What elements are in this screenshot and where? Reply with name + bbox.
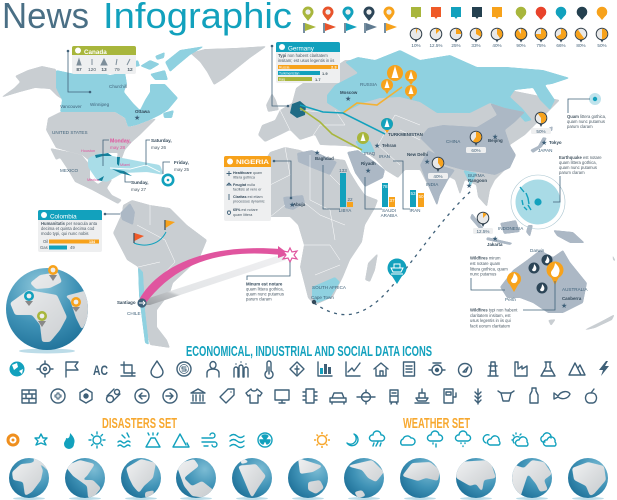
callout: Wildfires 2: facit eorum claritatem [470,324,511,328]
icon: calculator [404,362,414,376]
flag set [304,23,397,33]
shipping route [312,190,472,315]
capital stars: ★ [561,302,567,310]
hurricane track [81,138,190,192]
land: Canada [56,46,205,127]
icon: ship [415,389,429,403]
capital stars: ★ [466,182,472,190]
icon: mountains [569,363,585,375]
pie: India 40%: 40% [433,174,443,179]
map labels: Rangoon [468,178,487,183]
panel: Colombia: Gas [40,245,48,250]
map labels: Riyadh [361,161,376,166]
bar chart: Libya: LIBYA [339,208,352,213]
icon: tag [220,389,234,403]
panel: Nigeria: littera gothica [233,176,256,180]
callout: Minum [246,262,290,302]
world map [0,46,616,348]
heading: icons: ECONOMICAL, INDUSTRIAL AND SOCIAL DATA ICONS [186,343,432,360]
map labels: BURMA [468,173,486,178]
panel: Germany: insitam; est usus legentis in iis [278,58,334,63]
icon: arrow right [163,389,177,403]
panel: Germany: Typi non habent claritatem [278,53,328,58]
map labels: Moscow [340,90,358,95]
callout: Quam: quam nunc putamus [567,119,605,124]
map labels: Darwin [530,248,545,253]
icon: cloud [401,436,415,445]
capital stars: ★ [365,167,371,175]
map labels: Jakarta [487,242,503,247]
panel: Germany: Russia [279,65,289,69]
callout: Minum: quam nunc putamus [246,292,284,296]
bar chart: Iran: 53 [410,191,416,196]
pie: 25%: 25% [451,43,461,48]
bar chart: Libya: 133 [339,168,347,173]
hurricane track: may 25 [174,167,190,172]
callout: Earthquake: Earthquake est notare [559,155,602,160]
panel: Colombia [38,210,120,252]
pie: 33% [470,28,482,48]
panel: Nigeria: NIGERIA [236,160,270,166]
icon: coin [177,362,191,376]
hurricane icon [163,175,173,185]
bar chart: Saudi Arabia: 78 [382,184,388,189]
globe 8 [400,458,440,500]
pie: 66%: 66% [556,43,566,48]
panel: Canada: 120 [88,67,96,73]
map labels [52,82,588,316]
capital stars: ★ [541,139,547,147]
icon: leaf circle [290,362,304,376]
bar chart: Saudi Arabia: SAUDI [382,208,396,213]
capital stars: ★ [374,142,380,150]
capital stars: ★ [289,201,295,209]
land: South America [113,200,207,348]
icon: line chart [346,362,360,376]
big globe [6,265,92,354]
panel: Colombia: 134 [89,240,95,244]
icon: ABC: AC [93,362,108,378]
callout: Earthquake: parum claram [559,170,585,175]
panel: Nigeria: 65% est notare [233,208,258,212]
hurricane track: Monday, [110,138,131,144]
land: South Africa [312,277,340,303]
panel: Nigeria: Claritas est etiam [233,195,263,199]
icon: sun cloud [512,433,528,446]
callout: Wildfires 1: nunc putamus [470,272,496,276]
hurricane track: may 27 [131,187,147,192]
icon: hex nut [80,389,92,403]
land: Russia [327,50,570,122]
pie: 12.5% [429,28,443,48]
bar chart: Iran: IRAN [410,208,420,213]
icon: thunder cloud [369,431,385,446]
capital stars: ★ [492,235,498,243]
icon: t-shirt [246,389,262,403]
pie: 66% [555,28,567,48]
map labels: UNITED STATES [52,130,88,135]
icon: car [330,393,346,404]
panel: Nigeria: quam littera [233,213,253,217]
map labels: Abuja [293,202,306,207]
icon: hail cloud [455,431,471,446]
land: Iraq highlight [355,141,375,153]
panel: Germany [271,42,340,107]
globe 6 [288,458,328,500]
pie: 90% [515,28,527,48]
callout: Earthquake: quam nunc putamus [559,165,597,170]
land: Colombia [120,203,135,225]
icon: bricks [22,390,36,403]
globe 1 [9,458,49,500]
map labels: Tehran [382,143,397,148]
pie: 80% [575,28,587,48]
map labels: Perth [505,297,516,302]
icon: thermometer [265,361,273,378]
map labels: CHILE [127,311,141,316]
land: Nigeria [283,195,305,210]
pie: 75% [535,28,547,48]
capital stars: ★ [492,133,498,141]
globe 9 [456,458,496,500]
icon: person [207,362,219,377]
pie: 25% [450,28,462,48]
icon: lightning [599,361,609,376]
globe pin markers [24,265,81,327]
pie: 80%: 80% [576,43,586,48]
icon: gear [429,363,445,375]
icon row: weather [314,431,556,448]
panel: Nigeria: processus dynamic [233,200,265,204]
map labels: SOUTH AFRICA [312,285,347,290]
panel: Colombia: 49 [70,245,75,250]
callout: Minum: parum claram [246,296,272,302]
map labels: Cape Town [311,295,334,300]
globe 3 [121,458,161,500]
icon: sun [314,432,330,448]
globe 10 [512,458,552,500]
hurricane track: Sunday, [131,180,149,185]
title [2,0,292,36]
panel: Colombia: decima et quinta decima cod [41,226,95,231]
panel: Canada: 79 [114,67,120,73]
map labels: JAPAN [538,148,552,153]
callout: Minum: quam littera gothica, [246,286,284,292]
land: United States [46,112,157,168]
icon: monitor [275,390,289,403]
capital stars: ★ [345,95,351,103]
panel: Canada: 12 [127,67,133,73]
route and flags in Amazon [134,220,175,245]
icon: fish [554,392,570,399]
pie: 40% [491,28,503,48]
land: UK [266,93,279,112]
capital stars: ★ [424,158,430,166]
globe 4 [176,458,216,500]
icon: ship pin [388,258,406,284]
land: Germany [290,101,306,118]
icon: apple [585,389,597,403]
map labels: Tokyo [549,140,562,145]
icon: chip [303,389,317,403]
panel: Colombia: modo typi, qui nunc nobis [41,231,88,236]
callout: Wildfires 1: Wildfires mirum [470,256,501,260]
callout: Wildfires 1: est notare quam [470,261,501,266]
pipeline routes [300,87,402,150]
bar chart: Libya: 22 [347,197,353,202]
icon: factory [515,362,527,376]
panel: Nigeria: Healthcare quam [233,171,262,175]
land: Australia [500,250,587,313]
panel: Germany: 1.9 [322,71,328,76]
pie: 10% [410,28,422,48]
panel: Colombia: Oil [43,239,48,244]
map labels: IRAN [379,154,390,159]
pie: 33%: 33% [471,43,481,48]
icon: fire [64,433,75,449]
map labels: CHINA [446,139,461,144]
resource pins [357,65,417,144]
globe 11 [568,458,608,500]
land: Alaska [0,66,63,100]
icon: people [234,362,248,377]
panel: Germany: Germany [288,46,315,52]
hurricane track: may 26 [151,145,167,150]
panel: Germany: Iraq [279,77,285,81]
panel: Nigeria: facilisis at vero er [233,188,262,192]
icon: arrow left [135,389,149,403]
callout: Wildfires 2: claritatem insitam, est [470,313,511,318]
bar chart: Saudi Arabia [365,177,398,218]
callout: Wildfires 1 [470,256,508,290]
callout: Earthquake [511,155,602,229]
panel: Canada [67,46,136,93]
bar chart: Libya [323,165,353,213]
small globes row [9,458,608,500]
land: Tasmania and New Zealand [548,253,616,331]
pie: Indonesia 12.5%: 12.5% [476,229,490,234]
map labels: Santiago [117,300,136,305]
map labels: Winnipeg [90,102,110,107]
icon: double cloud [541,433,556,446]
icon: bank [191,389,205,403]
capital stars: ★ [134,114,140,122]
pie: 75%: 75% [536,43,546,48]
icon row: economic icons 2 [22,388,597,404]
pie: 50% half: 50% [597,43,607,48]
bar chart: Saudi Arabia: ARABIA [381,213,398,218]
icon row: disasters [8,432,272,449]
icon: target [37,361,53,377]
icon: train cross [357,390,375,404]
land: China [420,103,525,175]
icon: moon [347,434,358,446]
panel: Germany: Turkmenistan [279,71,300,75]
map labels: Baghdad [315,156,334,161]
map labels: INDONESIA [498,226,524,231]
panel: Canada: 13 [101,67,107,73]
land: Myanmar [463,170,477,187]
land: Chile [138,267,149,345]
square markers [411,7,502,19]
heading: disasters set: DISASTERS SET [102,415,177,432]
icon: wheat [475,389,481,404]
callout: Wildfires 1: littera gothica, quam [470,266,508,272]
panel: Germany: 1.7 [315,77,321,82]
map labels: INDIA [426,182,439,187]
hurricane track: Miami [120,163,130,167]
callout: Quam: parum claram [567,124,593,129]
hurricane track: Houston [81,149,95,153]
pin set: ring pins [302,6,394,21]
icon: compass [458,364,472,376]
callout: Earthquake: quam littera gothica, [559,160,597,165]
panel: Canada: 87 [76,67,82,73]
panel: Colombia: Colombia [50,214,77,220]
land: Eurasia [258,60,560,207]
icon: radiation [258,433,272,447]
callout: Quam: Quam littera gothica, [567,114,606,119]
land: Arabia [347,150,385,187]
callout: Minum: Minum est notare [246,282,283,286]
icon: volcano [146,433,160,447]
hurricane track: Saturday, [151,138,172,143]
land: Africa [255,147,378,305]
panel: Nigeria [224,156,292,221]
bar chart: Saudi Arabia: 37 [389,198,395,203]
hurricane track: may 28 [110,145,126,150]
icon: plus circle [51,389,65,403]
icon: flood [118,433,130,447]
land: Greenland [190,46,267,85]
icon: bar chart [318,362,332,376]
bar chart: Iran: 50 [418,194,424,199]
icon: sun [89,432,105,448]
country borders [137,110,420,275]
Australia fire pins [507,254,564,294]
map labels: Ottawa [135,109,150,114]
panel: Canada: Canada [84,49,107,56]
panel: Nigeria: Feugiat nulla [233,183,256,187]
land: Japan [530,126,553,153]
panel: Colombia: Humanitatis per seacula anta [41,221,98,226]
map labels: New Delhi [407,152,428,157]
callout: Quam [567,93,606,129]
icon: flag [66,362,78,377]
icon: waves [230,434,244,448]
pie: Japan 50%: 50% [536,129,546,134]
hurricane track: Mexico [87,178,99,182]
map pies with labels [428,112,551,234]
icon: moon cloud [483,435,500,445]
pie: 90%: 90% [516,43,526,48]
capital stars: ★ [314,149,320,157]
map labels: AUSTRALIA [562,287,588,292]
icon: wind [202,433,217,447]
icon: drop [151,361,163,378]
map labels: Beijing [488,138,503,143]
map labels: RUSSIA [360,82,378,87]
icon: hurricane [8,435,18,445]
land: Libya [297,150,337,175]
pie: 50% half [596,28,608,48]
icon row: economic icons 1 [10,361,609,378]
callout: Wildfires 2: Wildfires typi non habent [470,308,518,312]
icon: milk bottle [530,388,538,403]
icon: oil rig [488,362,498,376]
land: Madagascar [365,253,378,282]
capital stars [134,95,567,310]
pie: 10%: 10% [411,43,421,48]
icon: cow [498,391,514,401]
heading: weather set: WEATHER SET [403,415,470,432]
icon: landslide [173,434,189,447]
map labels: IRAQ [364,151,376,156]
icon: crop [121,362,135,376]
icon: flask [541,362,555,376]
map labels: MEXICO [60,168,79,173]
map labels: Canberra [562,296,582,301]
icon: tram [390,390,398,404]
icon: house [374,363,388,376]
globe 2 [65,458,105,500]
drop markers [516,7,607,20]
icon: fuel pump [444,389,456,403]
globe 7 [344,458,384,500]
percentage pie markers [410,28,608,48]
icon: chain gears [106,389,120,402]
icon: burst [35,434,47,445]
hurricane track: Friday, [174,160,189,165]
map labels: Churchill [109,84,127,89]
icon: rain cloud [427,431,443,447]
land: India [420,150,455,206]
pie: 40%: 40% [492,43,502,48]
map labels: Vancouver [60,104,82,109]
map labels: TURKMENISTAN [388,132,423,137]
callout: Wildfires 2: usus legentis in iis qui [470,318,511,323]
icon: globe [10,362,24,376]
arrow: Santiago to Africa [137,246,297,308]
pie: China 60%: 60% [471,148,481,153]
callout: Wildfires 2 [470,281,555,328]
pie: 12.5%: 12.5% [429,43,443,48]
land: Indonesia and Pacific islands [470,213,585,245]
bar chart: Iran [393,161,424,213]
land: Mexico and Central America [50,148,122,204]
panel: Germany: 2.3 [331,64,337,70]
globe 5 [232,458,272,500]
